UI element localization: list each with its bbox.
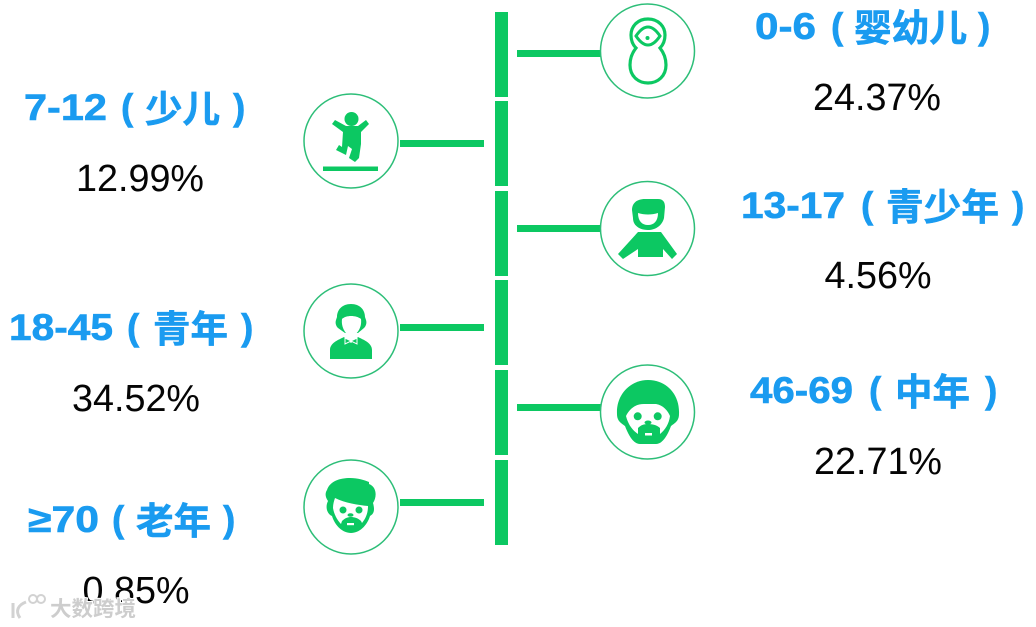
label: 70+ seniors	[28, 499, 235, 542]
label: 13-17 teens: 13-17	[741, 185, 845, 226]
value: 12.99%: 12.99%	[76, 158, 204, 200]
label: 70+ seniors: 老年	[136, 501, 211, 542]
connector: 13-17	[517, 225, 601, 232]
label: 18-45 youth: (	[127, 307, 140, 348]
icon: middle-aged bearded man	[600, 365, 694, 459]
icon: teenager	[600, 182, 694, 276]
icon: swaddled baby	[600, 4, 694, 98]
central timeline bar	[495, 12, 508, 545]
label: 0-6 infants: )	[978, 6, 990, 47]
label: 46-69 middle age: )	[985, 370, 997, 411]
connector: 46-69	[517, 404, 601, 411]
connector: 7-12	[400, 140, 484, 147]
label: 13-17 teens: )	[1012, 185, 1024, 226]
value: 0.85%: 0.85%	[82, 570, 190, 612]
label: 70+ seniors: )	[223, 499, 235, 540]
label: 18-45 youth: )	[241, 307, 253, 348]
label: 7-12 children	[24, 87, 245, 130]
label: 70+ seniors: ≥70	[28, 499, 99, 540]
label: 13-17 teens	[741, 185, 1024, 228]
watermark logo	[13, 595, 136, 621]
connector: 18-45	[400, 324, 484, 331]
label: 0-6 infants	[755, 6, 990, 49]
label: 46-69 middle age	[750, 370, 997, 413]
label: 18-45 youth: 18-45	[9, 307, 113, 348]
value: 4.56%: 4.56%	[824, 255, 932, 297]
watermark logo: 大数跨境	[50, 598, 136, 621]
label: 13-17 teens: 青少年	[886, 187, 999, 228]
label: 7-12 children: 7-12	[24, 87, 107, 128]
connector: 0-6	[517, 50, 601, 57]
label: 0-6 infants: (	[831, 6, 844, 47]
label: 13-17 teens: (	[861, 185, 874, 226]
label: 7-12 children: (	[121, 87, 134, 128]
label: 46-69 middle age: (	[869, 370, 882, 411]
label: 46-69 middle age: 46-69	[750, 370, 853, 411]
icon: jumping child	[304, 94, 398, 188]
value: 22.71%: 22.71%	[814, 441, 942, 483]
label: 7-12 children: 少儿	[145, 89, 220, 130]
connector: 70+	[400, 499, 484, 506]
label: 18-45 youth: 青年	[153, 309, 228, 350]
label: 18-45 youth	[9, 307, 253, 350]
icon: elderly man with beret	[304, 460, 398, 554]
value: 34.52%: 34.52%	[72, 378, 200, 420]
value: 24.37%: 24.37%	[813, 77, 941, 119]
label: 0-6 infants: 婴幼儿	[854, 8, 967, 49]
label: 7-12 children: )	[233, 87, 245, 128]
label: 70+ seniors: (	[112, 499, 125, 540]
label: 0-6 infants: 0-6	[755, 6, 816, 47]
icon: adult man with bow tie	[304, 284, 398, 378]
label: 46-69 middle age: 中年	[895, 372, 970, 413]
